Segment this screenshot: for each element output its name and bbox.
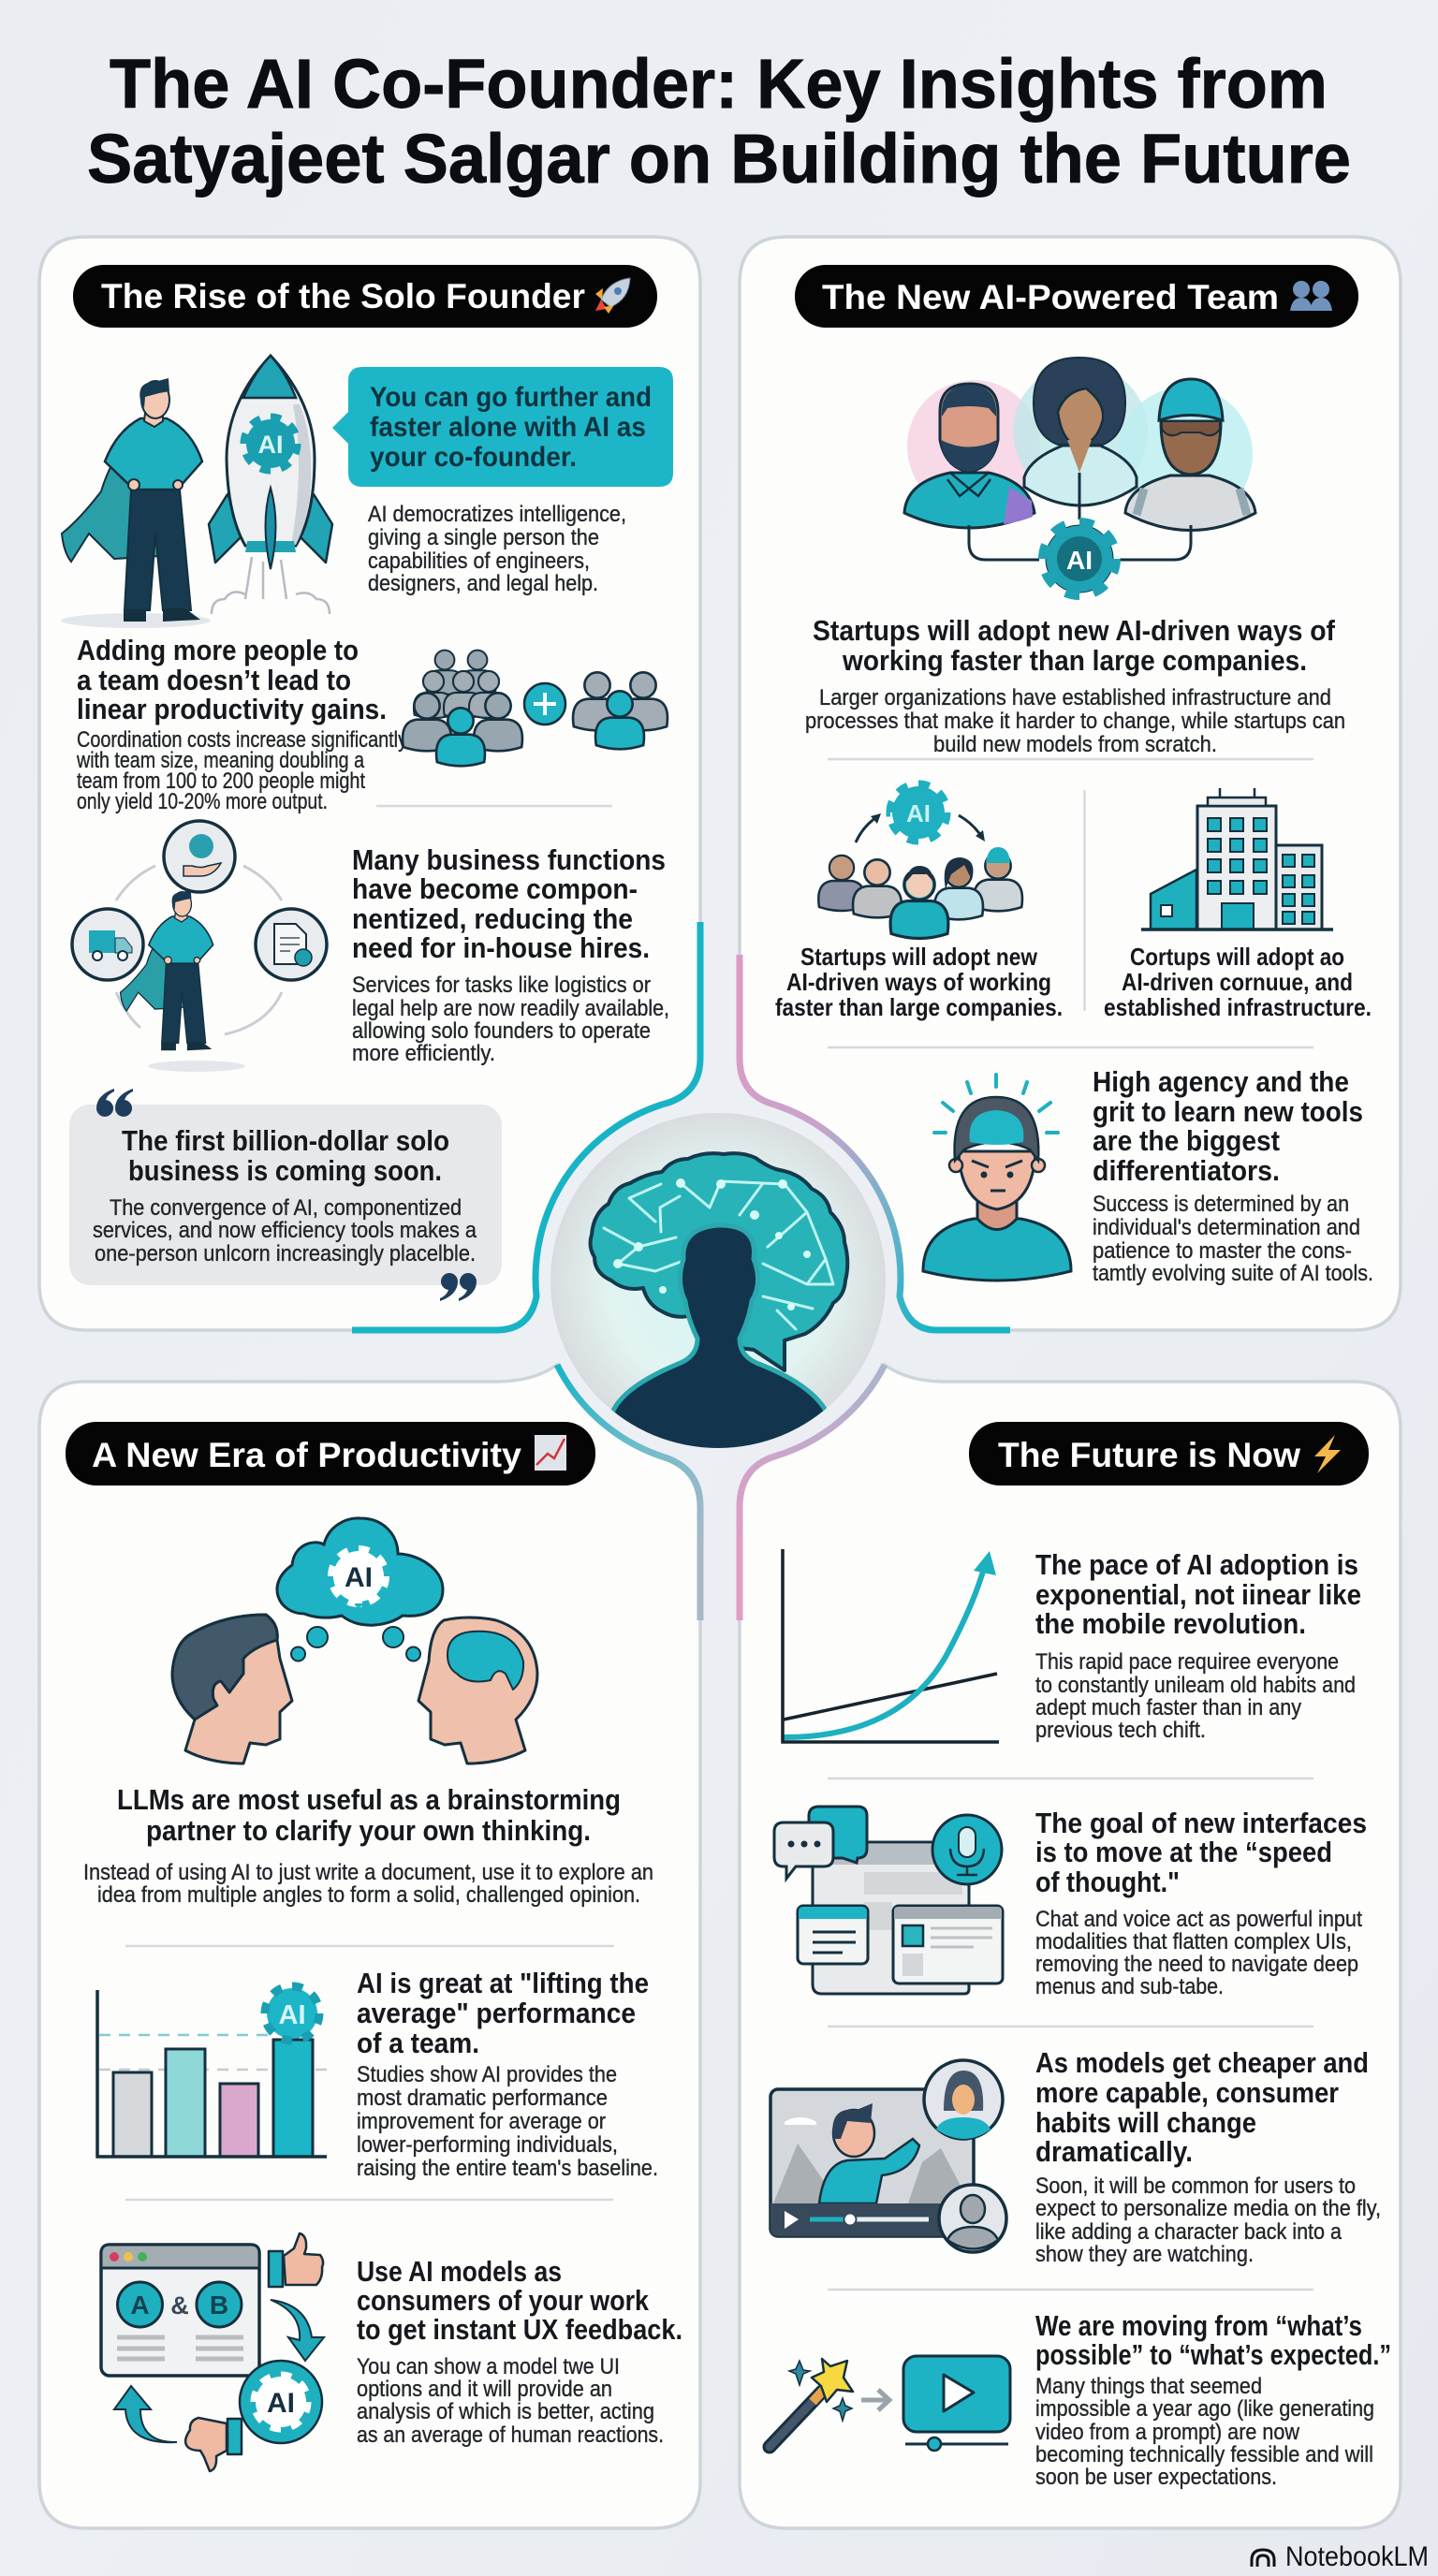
small detail window bbox=[893, 1906, 1003, 1983]
text: LLMs brainstorming: LLMs are most useful as a brainstorming bbox=[117, 1783, 621, 1816]
icon: AI gear: AI bbox=[279, 2000, 305, 2030]
text: consumer habits: dramatically. bbox=[1035, 2135, 1193, 2168]
text: UX feedback: as an average of human reactions. bbox=[357, 2422, 664, 2448]
text: consumer habits: habits will change bbox=[1035, 2106, 1256, 2139]
main window bbox=[813, 1842, 969, 1994]
icon: legal document bbox=[256, 909, 327, 980]
text: speed of thought: The goal of new interfaces bbox=[1035, 1807, 1367, 1839]
illustration: corporate building bbox=[1141, 788, 1333, 929]
illustration: magic wand to video bbox=[770, 2356, 1010, 2451]
right head with brain bbox=[418, 1617, 537, 1764]
text: adding more people bbox=[76, 634, 407, 814]
quote panel: The convergence of AI, componentized bbox=[110, 1195, 462, 1221]
icon: chart emoji bbox=[535, 1435, 566, 1471]
text: startups column bbox=[775, 943, 1063, 1021]
text: pace of adoption: The pace of AI adoption is bbox=[1035, 1548, 1358, 1581]
heading pill bbox=[73, 265, 657, 328]
man with beard bbox=[904, 384, 1034, 528]
arrow bbox=[861, 2390, 889, 2410]
text: lifting the average: lower-performing individuals, bbox=[357, 2132, 618, 2158]
text: business functions: need for in-house hires. bbox=[352, 931, 650, 964]
text: possible to expected: impossible a year ago (like generating bbox=[1035, 2396, 1374, 2422]
quote panel: The first billion-dollar solo bbox=[122, 1124, 449, 1157]
text: adding more people: Coordination costs increase significantly bbox=[77, 727, 407, 753]
text: AI democratizes intelligence: AI democratizes intelligence, bbox=[368, 502, 626, 527]
heading pill bbox=[969, 1422, 1369, 1486]
text: possible to expected: Many things that seemed bbox=[1035, 2374, 1262, 2399]
heading pill: A New Era of Productivity bbox=[92, 1436, 521, 1474]
callout: go further bbox=[332, 367, 673, 487]
text: startups adopt faster: processes that make it harder to change, while startups can bbox=[805, 709, 1345, 734]
text: possible to expected: becoming technically fessible and will bbox=[1035, 2442, 1373, 2467]
text: UX feedback: to get instant UX feedback. bbox=[357, 2313, 682, 2346]
text: business functions: more efficiently. bbox=[352, 1041, 495, 1066]
line chart: exponential vs linear bbox=[783, 1549, 999, 1742]
engineer with hard hat bbox=[1125, 379, 1255, 530]
illustration: AI rocket bbox=[209, 356, 332, 614]
icon: open quote bbox=[96, 1089, 133, 1117]
text: startups column: AI-driven ways of working bbox=[786, 968, 1051, 996]
text: adding more people: a team doesn’t lead to bbox=[77, 664, 351, 696]
illustration: caped founder bbox=[61, 378, 211, 628]
avatar: user bbox=[939, 2185, 1006, 2252]
text: UX feedback: You can show a model twe UI bbox=[357, 2354, 620, 2379]
woman bbox=[1024, 358, 1137, 520]
heading pill: The New AI-Powered Team bbox=[822, 278, 1279, 316]
quote panel bbox=[69, 1089, 502, 1301]
text: corporate column: established infrastructure. bbox=[1104, 993, 1372, 1021]
illustration: AI rocket: AI bbox=[258, 431, 283, 459]
text: speed of thought: is to move at the “speed bbox=[1035, 1836, 1332, 1868]
text: consumer habits bbox=[1035, 2046, 1381, 2267]
text: adding more people: only yield 10-20% more output. bbox=[77, 789, 328, 814]
text: consumer habits: expect to personalize media on the fly, bbox=[1035, 2196, 1381, 2221]
icon: wand bbox=[770, 2359, 853, 2447]
icon: rocket emoji bbox=[595, 278, 630, 314]
text: speed of thought: Chat and voice act as powerful input bbox=[1035, 1907, 1362, 1932]
heading pill: The Rise of the Solo Founder bbox=[101, 277, 585, 315]
text: startups adopt faster bbox=[805, 614, 1345, 757]
icon: AI circle: AI bbox=[267, 2388, 295, 2419]
title: Satyajeet Salgar on Building the Future bbox=[87, 120, 1351, 198]
bar chart: lifting the average bbox=[97, 1986, 327, 2157]
panel: A New Era of Productivity bbox=[39, 1365, 700, 2528]
silhouette bbox=[610, 1222, 828, 1448]
text: UX feedback: consumers of your work bbox=[357, 2284, 650, 2317]
text: lifting the average: of a team. bbox=[357, 2027, 479, 2059]
icon: close quote bbox=[440, 1273, 477, 1301]
text: possible to expected bbox=[1035, 2309, 1391, 2490]
text: high agency: Success is determined by an bbox=[1093, 1192, 1349, 1217]
heading pill bbox=[795, 265, 1358, 328]
text: LLMs brainstorming bbox=[83, 1783, 653, 1908]
text: pace of adoption: the mobile revolution. bbox=[1035, 1607, 1306, 1640]
text: possible to expected: We are moving from “what’s bbox=[1035, 2309, 1362, 2342]
text: corporate column bbox=[1104, 943, 1372, 1021]
panel: The Rise of the Solo Founder bbox=[39, 237, 700, 1330]
text: business functions: nentized, reducing the bbox=[352, 902, 633, 935]
text: startups column: Startups will adopt new bbox=[800, 943, 1038, 971]
text: speed of thought: modalities that flatten complex UIs, bbox=[1035, 1929, 1352, 1954]
text: corporate column: Cortups will adopt ao bbox=[1130, 943, 1344, 971]
text: UX feedback: Use AI models as bbox=[357, 2255, 562, 2288]
text: consumer habits: more capable, consumer bbox=[1035, 2076, 1339, 2109]
browser window with A and B: & bbox=[170, 2291, 189, 2320]
text: AI democratizes intelligence: capabilities of engineers, bbox=[368, 549, 590, 574]
icon: AI gear bbox=[1044, 523, 1115, 594]
text: pace of adoption: previous tech chift. bbox=[1035, 1718, 1206, 1743]
text: UX feedback bbox=[357, 2255, 682, 2448]
text: high agency: differentiators. bbox=[1093, 1154, 1280, 1187]
text: AI democratizes intelligence: giving a single person the bbox=[368, 525, 599, 550]
text: adding more people: Adding more people to bbox=[77, 634, 359, 666]
quote panel: business is coming soon. bbox=[128, 1154, 442, 1187]
text: consumer habits: As models get cheaper and bbox=[1035, 2046, 1369, 2079]
text: startups adopt faster: build new models from scratch. bbox=[933, 732, 1217, 757]
text: pace of adoption: to constantly unileam old habits and bbox=[1035, 1673, 1356, 1698]
text: high agency: patience to master the cons- bbox=[1093, 1238, 1352, 1264]
arrow: back up bbox=[114, 2386, 177, 2442]
text: corporate column: AI-driven cornuue, and bbox=[1122, 968, 1353, 996]
arrow: down to AI bbox=[271, 2300, 324, 2361]
callout: go further: faster alone with AI as bbox=[370, 412, 646, 443]
icon: globe in hand bbox=[164, 821, 235, 892]
text: startups adopt faster: working faster than large companies. bbox=[842, 644, 1307, 677]
callout: go further: your co-founder. bbox=[370, 442, 577, 473]
title: The AI Co-Founder: Key Insights from bbox=[110, 45, 1328, 123]
text: high agency: High agency and the bbox=[1093, 1065, 1349, 1098]
quote panel: one-person unlcorn increasingly placelble. bbox=[95, 1241, 476, 1266]
heading pill: The Future is Now bbox=[998, 1436, 1300, 1474]
text: LLMs brainstorming: idea from multiple angles to form a solid, challenged opinion. bbox=[97, 1882, 640, 1908]
icon: lightning bolt bbox=[1314, 1435, 1341, 1473]
text: lifting the average: raising the entire team's baseline. bbox=[357, 2156, 658, 2181]
text: AI democratizes intelligence: designers, and legal help. bbox=[368, 571, 598, 596]
text: lifting the average: AI is great at "lifting the bbox=[357, 1967, 649, 1999]
text: lifting the average: Studies show AI provides the bbox=[357, 2062, 617, 2087]
text: speed of thought: removing the need to navigate deep bbox=[1035, 1952, 1358, 1977]
text: consumer habits: show they are watching. bbox=[1035, 2242, 1254, 2267]
text: lifting the average: average" performance bbox=[357, 1997, 636, 2029]
text: business functions: Services for tasks like logistics or bbox=[352, 973, 651, 998]
icon: thumbs down bbox=[185, 2418, 242, 2471]
text: consumer habits: like adding a character back into a bbox=[1035, 2219, 1343, 2245]
text: adding more people: linear productivity gains. bbox=[77, 693, 387, 725]
text: startups adopt faster: Startups will adopt new AI-driven ways of bbox=[813, 614, 1336, 647]
icon: AI gear bbox=[265, 1986, 319, 2041]
icon: AI cloud: AI bbox=[345, 1562, 373, 1593]
text: high agency: individual's determination and bbox=[1093, 1215, 1360, 1240]
icon: video play bbox=[903, 2356, 1010, 2451]
text: LLMs brainstorming: partner to clarify your own thinking. bbox=[146, 1814, 591, 1847]
text: adding more people: team from 100 to 200 people might bbox=[77, 768, 365, 794]
text: consumer habits: Soon, it will be common for users to bbox=[1035, 2174, 1356, 2199]
browser window with A and B: A bbox=[130, 2291, 150, 2320]
connector lines bbox=[969, 473, 1191, 560]
avatar: woman bbox=[924, 2060, 1003, 2139]
icon: AI cloud bbox=[277, 1518, 443, 1625]
browser window with A and B bbox=[101, 2245, 259, 2376]
text: lifting the average: most dramatic performance bbox=[357, 2086, 608, 2111]
left head with hair bbox=[172, 1615, 292, 1764]
central figure: person with neural brain bbox=[550, 1113, 886, 1460]
text: pace of adoption: This rapid pace requiree everyone bbox=[1035, 1649, 1339, 1675]
panel: The New AI-Powered Team bbox=[740, 237, 1401, 1330]
text: AI democratizes intelligence bbox=[368, 502, 626, 596]
text: startups adopt faster: Larger organizations have established infrastructure and bbox=[819, 685, 1331, 710]
text: speed of thought: of thought." bbox=[1035, 1866, 1180, 1898]
text: lifting the average bbox=[357, 1967, 658, 2181]
text: adding more people: with team size, meaning doubling a bbox=[76, 748, 365, 773]
illustration: diverse team connected to AI bbox=[904, 358, 1255, 594]
text: high agency: are the biggest bbox=[1093, 1124, 1280, 1157]
icon: delivery truck bbox=[72, 909, 143, 980]
illustration: thought cloud with two heads bbox=[172, 1518, 537, 1764]
illustration: chat and voice interfaces bbox=[774, 1807, 1003, 1994]
icon: microphone bbox=[932, 1815, 1002, 1884]
quote panel: services, and now efficiency tools makes a bbox=[93, 1218, 477, 1243]
illustration: startup team with AI cycle: AI bbox=[906, 799, 931, 827]
text: LLMs brainstorming: Instead of using AI to just write a document, use it to explore an bbox=[83, 1860, 653, 1885]
text: business functions: have become compon- bbox=[352, 872, 638, 905]
small list window bbox=[798, 1906, 868, 1964]
text: possible to expected: soon be user expectations. bbox=[1035, 2465, 1277, 2490]
illustration: personalized video bbox=[770, 2060, 1006, 2252]
title bbox=[87, 45, 1351, 198]
text: UX feedback: analysis of which is better, acting bbox=[357, 2399, 654, 2424]
text: UX feedback: options and it will provide an bbox=[357, 2377, 612, 2402]
icon: team plus team bbox=[403, 651, 668, 766]
illustration: determined person with brain bbox=[923, 1075, 1071, 1281]
icon: thumbs up bbox=[269, 2233, 323, 2287]
text: business functions: Many business functions bbox=[352, 843, 666, 876]
text: possible to expected: video from a prompt) are now bbox=[1035, 2420, 1300, 2445]
browser window with A and B: B bbox=[210, 2291, 228, 2320]
icon: AI gear: AI bbox=[1066, 546, 1093, 575]
text: high agency bbox=[1093, 1065, 1373, 1286]
illustration: founder with service icons bbox=[72, 821, 327, 1072]
text: high agency: tamtly evolving suite of AI tools. bbox=[1093, 1261, 1373, 1286]
text: pace of adoption bbox=[1035, 1548, 1361, 1743]
callout: go further: You can go further and bbox=[370, 382, 652, 413]
text: speed of thought: menus and sub-tabe. bbox=[1035, 1974, 1224, 1999]
text: business functions bbox=[352, 843, 669, 1066]
video frame bbox=[770, 2089, 974, 2236]
text: lifting the average: improvement for average or bbox=[357, 2109, 606, 2134]
brain bbox=[591, 1153, 847, 1370]
grey chat bubble bbox=[774, 1822, 833, 1879]
text: business functions: legal help are now readily available, bbox=[352, 996, 669, 1021]
text: pace of adoption: exponential, not iinear like bbox=[1035, 1578, 1361, 1611]
illustration: startup team with AI cycle bbox=[818, 784, 1022, 938]
text: startups column: faster than large companies. bbox=[775, 993, 1063, 1021]
icon: people emoji bbox=[1290, 281, 1332, 311]
illustration: A/B UX feedback loop bbox=[101, 2233, 324, 2471]
teal chat bubble bbox=[809, 1807, 867, 1863]
text: high agency: grit to learn new tools bbox=[1093, 1095, 1363, 1128]
text: pace of adoption: adept much faster than in any bbox=[1035, 1695, 1301, 1720]
heading pill bbox=[66, 1422, 595, 1486]
text: speed of thought bbox=[1035, 1807, 1367, 1999]
icon: AI circle bbox=[240, 2361, 322, 2443]
panel: The Future is Now bbox=[740, 1365, 1401, 2528]
text: business functions: allowing solo founders to operate bbox=[352, 1018, 651, 1044]
